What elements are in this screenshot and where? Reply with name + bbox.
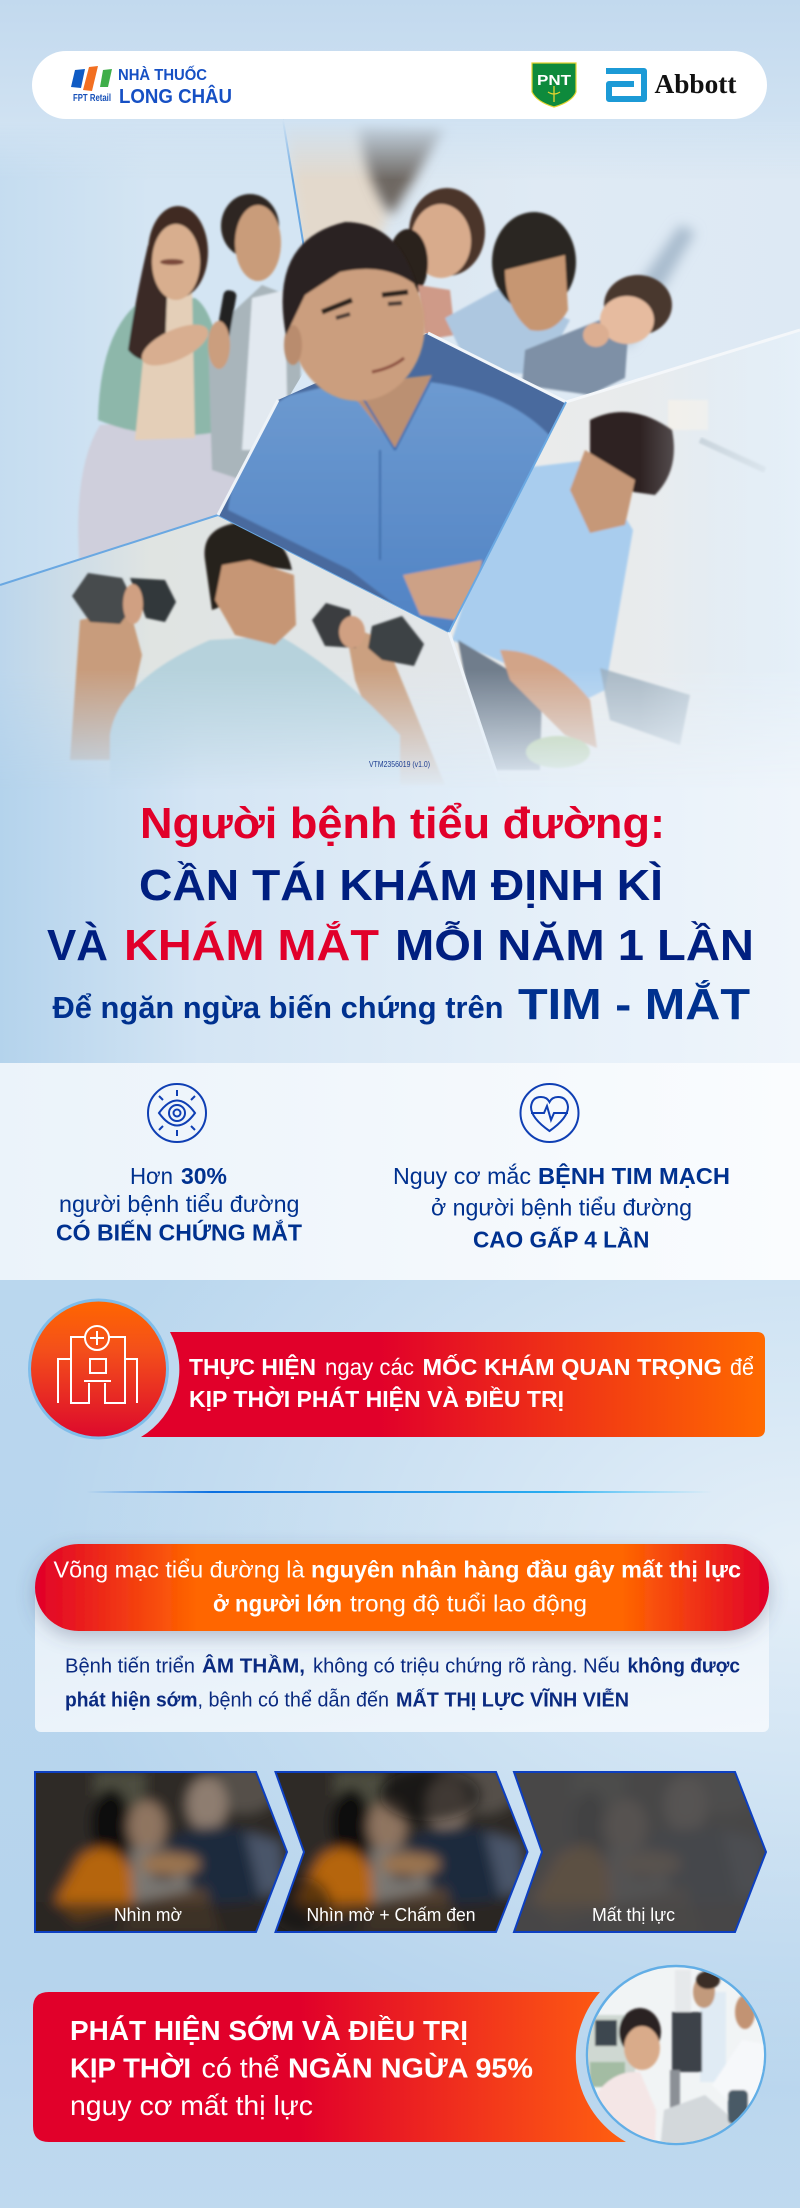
stat: cardiovascular risk: Nguy cơ mắc — [393, 1163, 531, 1189]
stat: cardiovascular risk: ở người bệnh tiểu đường — [431, 1194, 692, 1220]
chevron: vision loss: Mất thị lực — [592, 1905, 675, 1925]
logo: FPT Retail Long Châu: LONG CHÂU — [119, 84, 232, 108]
banner: early detection: KỊP THỜI — [70, 2052, 191, 2084]
banner: early detection — [33, 1966, 770, 2150]
icon: hospital — [28, 1298, 169, 1440]
title: TIM - MẮT — [518, 979, 750, 1029]
heading pill: trong độ tuổi lao động — [350, 1590, 587, 1616]
logo: Abbott: Abbott — [654, 69, 737, 99]
heading pill: Võng mạc tiểu đường là — [54, 1556, 305, 1582]
icon: heart with pulse — [520, 1084, 578, 1142]
banner: early detection: có thể — [202, 2052, 280, 2084]
icon: eye — [148, 1084, 206, 1142]
photo: couple singing — [0, 148, 302, 584]
banner: early detection: PHÁT HIỆN SỚM VÀ ĐIỀU TRỊ — [70, 2015, 468, 2046]
title: CẦN TÁI KHÁM ĐỊNH KÌ — [139, 860, 663, 910]
banner: important check-up milestones: MỐC KHÁM QUAN TRỌNG — [422, 1353, 722, 1380]
body text: không được — [628, 1656, 740, 1678]
logo: FPT Retail Long Châu: NHÀ THUỐC — [118, 64, 207, 84]
photo: man cooking — [449, 330, 800, 790]
title: MỖI NĂM 1 LẦN — [395, 919, 754, 970]
logo: FPT Retail Long Châu — [71, 64, 232, 108]
banner: important check-up milestones: ngay các — [325, 1354, 414, 1380]
panel edge lines — [0, 120, 800, 790]
logo: university shield — [532, 63, 576, 107]
body text: phát hiện sớm — [65, 1690, 198, 1712]
body text: không có triệu chứng rõ ràng. Nếu — [313, 1656, 620, 1678]
stat: eye complications: Hơn — [130, 1163, 173, 1189]
title: Người bệnh tiểu đường: — [140, 799, 665, 848]
banner: important check-up milestones: để — [730, 1354, 754, 1380]
panel: key statistics — [0, 1063, 800, 1280]
logo: Abbott — [606, 69, 737, 99]
banner: important check-up milestones: THỰC HIỆN — [189, 1353, 316, 1380]
header logo bar — [32, 51, 767, 119]
stat: eye complications: 30% — [181, 1163, 227, 1189]
stat: cardiovascular risk — [393, 1162, 730, 1252]
version code: VTM2356019 (v1.0) — [369, 760, 430, 769]
title: KHÁM MẮT — [124, 920, 379, 970]
banner: early detection: nguy cơ mất thị lực — [70, 2090, 313, 2121]
chevron: vision loss — [512, 1771, 767, 1933]
stat: cardiovascular risk: BỆNH TIM MẠCH — [538, 1162, 730, 1189]
logo: FPT Retail Long Châu: FPT Retail — [73, 93, 111, 104]
chevron: blurred vision with dark spots — [274, 1771, 528, 1933]
heading pill — [35, 1544, 769, 1631]
body text: ÂM THẦM, — [202, 1654, 305, 1678]
body text: MẤT THỊ LỰC VĨNH VIỄN — [396, 1688, 629, 1712]
photo: man in blue shirt — [218, 222, 566, 640]
hero photo collage — [0, 120, 800, 795]
stat: cardiovascular risk: CAO GẤP 4 LẦN — [473, 1226, 650, 1252]
body text: Bệnh tiến triển — [65, 1656, 195, 1678]
panel: diabetic retinopathy — [35, 1544, 769, 1732]
photo: eye examination — [585, 1966, 770, 2150]
title: Để ngăn ngừa biến chứng trên — [52, 990, 504, 1025]
title — [47, 799, 754, 1029]
title: VÀ — [47, 920, 108, 970]
heading pill: ở người lớn — [213, 1590, 342, 1616]
heading pill: nguyên nhân hàng đầu gây mất thị lực — [311, 1556, 741, 1582]
body text: , bệnh có thể dẫn đến — [198, 1688, 389, 1712]
chevron: blurred vision: Nhìn mờ — [114, 1905, 182, 1925]
body text — [65, 1654, 740, 1712]
chevron: blurred vision with dark spots: Nhìn mờ + Chấm đen — [306, 1905, 476, 1925]
chevron: blurred vision — [34, 1771, 288, 1933]
stat: eye complications: người bệnh tiểu đường — [59, 1191, 300, 1217]
banner: important check-up milestones — [28, 1298, 765, 1440]
logo: university shield: PNT — [537, 72, 571, 89]
banner: important check-up milestones: KỊP THỜI PHÁT HIỆN VÀ ĐIỀU TRỊ — [189, 1385, 564, 1412]
stat: eye complications: CÓ BIẾN CHỨNG MẮT — [56, 1218, 302, 1246]
banner: early detection: NGĂN NGỪA 95% — [288, 2052, 533, 2084]
photo: family with baby — [283, 120, 800, 410]
photo: man lifting dumbbells — [0, 515, 502, 795]
stat: eye complications — [56, 1163, 302, 1246]
